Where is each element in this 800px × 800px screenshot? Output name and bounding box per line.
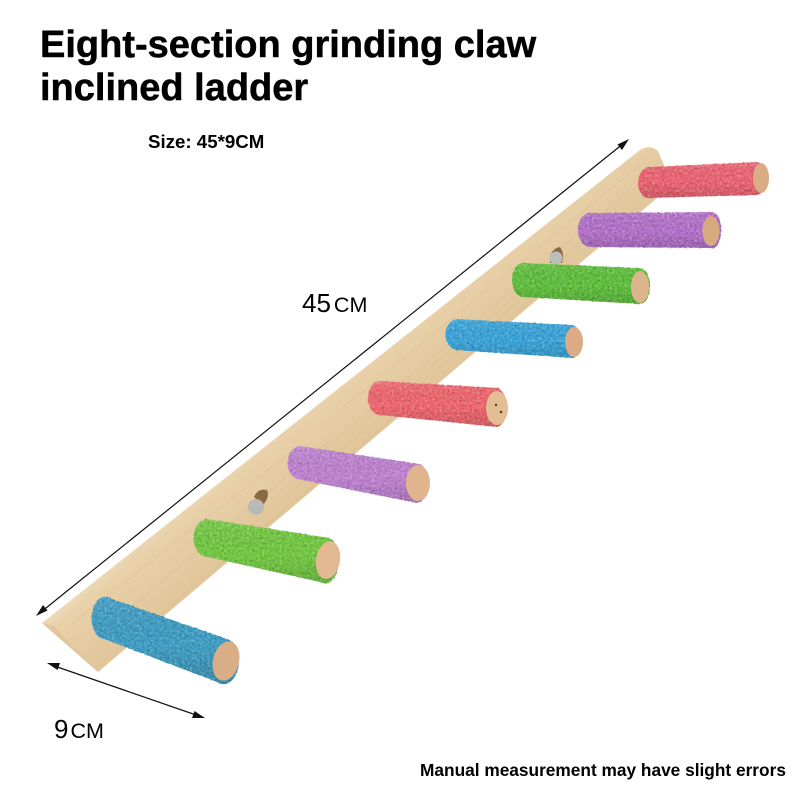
size label: Size: 45*9CM: [148, 131, 264, 152]
perch 4 red: [368, 381, 508, 427]
title: inclined ladder: [40, 67, 308, 109]
perch 5 blue: [445, 319, 583, 358]
width label: 9CM: [54, 714, 104, 744]
disclaimer note: Manual measurement may have slight errors: [420, 760, 786, 780]
title: Eight-section grinding claw: [40, 24, 536, 66]
product illustration: ladder with measurement arrows: [36, 139, 769, 718]
arrow: 9cm width: [47, 663, 205, 718]
wooden board: [42, 147, 668, 672]
perch 2 green: [193, 519, 343, 584]
title: [40, 24, 537, 109]
length label: 45CM: [302, 288, 367, 318]
perch 6 green: [512, 263, 650, 304]
perch 7 purple: [578, 212, 721, 248]
perch 1 blue: [92, 597, 243, 684]
perch 8 red: [638, 162, 769, 198]
screw holes: [248, 247, 563, 515]
perch 3 purple: [288, 446, 430, 503]
arrow: 45cm length: [36, 139, 629, 616]
